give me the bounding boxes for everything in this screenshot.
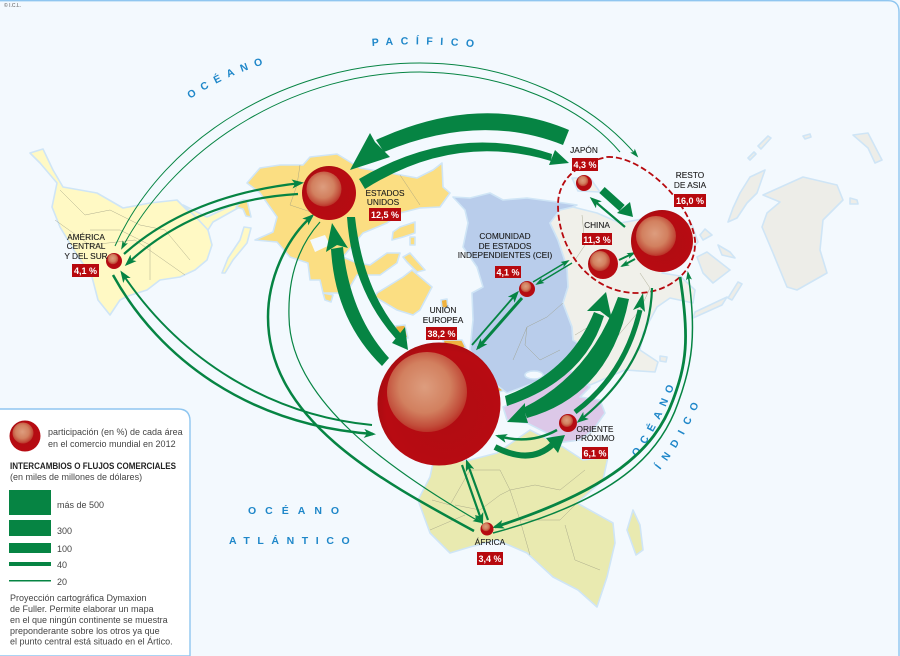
arrow: USA to Japan [359, 142, 569, 189]
panel: legend [0, 409, 190, 656]
projection note: preponderante sobre los otros ya que [10, 626, 160, 636]
label: China [582, 220, 612, 245]
arrow: rest of Asia to Japan [592, 199, 625, 227]
lake: Caspian area [525, 371, 543, 379]
label: Oriente Próximo [575, 424, 615, 459]
land: New Zealand area [728, 170, 858, 222]
label: Japón: 4,3 % [573, 160, 597, 170]
sphere: Rest of Asia [631, 210, 693, 272]
legend sphere key [10, 420, 40, 452]
legend sphere description: en el comercio mundial en 2012 [48, 439, 176, 449]
arrow: USA to EU [347, 217, 408, 350]
key: 20: 20 [57, 577, 67, 587]
projection note: en el que ningún continente se muestra [10, 615, 168, 625]
label: Comunidad de Estados Independientes: INDEPENDIENTES (CEI) [458, 250, 552, 260]
arrow: Asia to America, inner Pacific arc [122, 72, 620, 248]
sphere: Latin America [106, 253, 122, 269]
label: Comunidad de Estados Independientes: DE ESTADOS [479, 241, 532, 251]
land: Africa [418, 430, 615, 607]
sphere: Japan [576, 175, 592, 191]
land: South America [30, 149, 212, 315]
land: European Union fragments [395, 299, 506, 392]
key: 40: 40 [57, 560, 67, 570]
label: China: 11,3 % [583, 235, 611, 245]
arrow: EU to CEI [472, 293, 517, 345]
label: Unión Europea: 38,2 % [427, 329, 456, 339]
land: Central America [183, 200, 243, 230]
sphere: CEI [519, 281, 535, 297]
sphere: Africa [480, 522, 494, 536]
lakes: Arctic America [310, 235, 330, 252]
label: América Central y del Sur: 4,1 % [74, 266, 97, 276]
legend sphere description [48, 427, 183, 449]
region labels [64, 145, 707, 565]
land: Mexico tip [236, 200, 251, 217]
label: África: 3,4 % [478, 554, 502, 564]
label: América Central y del Sur: AMÉRICA [67, 232, 105, 242]
land: Asia [550, 207, 698, 385]
arrow: Africa to USA [268, 216, 474, 531]
key: 100: 100 [57, 544, 72, 554]
label: Estados Unidos: 12,5 % [371, 210, 399, 220]
label: Japón [570, 145, 598, 171]
sphere: United States [302, 166, 356, 220]
label: Oriente Próximo: ORIENTE [577, 424, 614, 434]
label: Oriente Próximo: PRÓXIMO [575, 433, 615, 443]
label: Estados Unidos: ESTADOS [365, 188, 405, 198]
label: Océano (Pacífico): OCÉANO [188, 58, 262, 98]
legend subheading: (en miles de millones de dólares) [10, 472, 142, 482]
sphere: Middle East [559, 414, 577, 432]
key: more than 500: más de 500 [57, 500, 104, 510]
sphere: China [588, 249, 618, 279]
label: Océano Atlántico: OCÉANO [248, 504, 348, 517]
dashed ring around Asian group [558, 157, 695, 293]
label: Unión Europea [423, 305, 464, 340]
label: Índico: ÍNDICO [654, 402, 698, 470]
arrow: EU to China, thick [505, 292, 612, 406]
label: Comunidad de Estados Independientes [458, 231, 552, 278]
legend heading: INTERCAMBIOS O FLUJOS COMERCIALES [10, 461, 176, 471]
label: Japón: JAPÓN [570, 145, 598, 155]
label: Resto de Asia: RESTO [676, 170, 705, 180]
land: Japan [572, 178, 600, 192]
land: Madagascar [627, 510, 643, 555]
label: Oriente Próximo: 6,1 % [583, 448, 607, 458]
credit: © I.C.L. [4, 2, 21, 9]
arrow: CEI to China [533, 261, 568, 282]
projection note: Proyección cartográfica Dymaxion [10, 593, 147, 603]
arrow: Middle East to rest of Asia [575, 293, 645, 412]
arrow: Africa to rest of Asia [493, 273, 693, 533]
arrow: EU to USA, thick [326, 223, 389, 366]
sphere: European Union [378, 342, 500, 466]
arrow: USA to Africa [289, 222, 480, 522]
country borders [55, 165, 650, 570]
label: Pacífico: PACÍFICO [372, 35, 474, 47]
arrow: rest of Asia to Middle East [579, 288, 652, 421]
label: Comunidad de Estados Independientes: 4,1 % [496, 268, 520, 278]
label: Comunidad de Estados Independientes: COMUNIDAD [479, 231, 531, 241]
label: Resto de Asia: 16,0 % [676, 196, 704, 206]
arrow: EU to Africa [462, 465, 482, 522]
projection note [10, 593, 173, 646]
land: Southeast Asian islands [660, 133, 882, 362]
label: Estados Unidos: UNIDOS [367, 197, 400, 207]
label: Resto de Asia: DE ASIA [674, 180, 707, 190]
label: Estados Unidos [365, 188, 405, 221]
label: África: ÁFRICA [475, 537, 506, 547]
arrow: America to Asia, outer Pacific arc [115, 63, 637, 246]
label: Unión Europea: EUROPEA [423, 315, 464, 325]
trade flow arrows [113, 63, 693, 533]
arrow: rest of Asia to Africa [495, 277, 686, 527]
land: Australia [762, 177, 843, 290]
label: Resto de Asia [674, 170, 707, 207]
arrow: China to rest of Asia [619, 253, 634, 260]
label: América Central y del Sur [64, 232, 108, 277]
legend background [0, 409, 190, 656]
land: CEI [453, 193, 578, 393]
arrow: China to EU, thick [507, 297, 629, 423]
land: Middle East [503, 370, 605, 443]
arrow: USA to America [127, 194, 298, 264]
label: Atlántico: ATLÁNTICO [229, 534, 357, 547]
projection note: el punto central está situado en el Ártico. [10, 636, 173, 646]
arrow: Middle East to EU [498, 430, 557, 439]
arrow: Africa to EU [467, 462, 488, 520]
land: North American islands [323, 222, 432, 315]
participation spheres [106, 166, 693, 536]
land: Caribbean islands [222, 227, 251, 273]
arrow: China to CEI [537, 263, 572, 284]
label: Océano (Índico): OCÉANO [632, 385, 673, 456]
label: China: CHINA [584, 220, 610, 230]
arrow: rest of Asia to China [622, 259, 635, 266]
arrow: America to USA [124, 183, 301, 254]
ocean labels [188, 35, 698, 547]
arrow: Japan to rest of Asia [602, 190, 633, 217]
arrow: CEI to EU [478, 298, 522, 348]
label: América Central y del Sur: Y DEL SUR [64, 251, 108, 261]
key: 300: 300 [57, 526, 72, 536]
label: Unión Europea: UNIÓN [430, 305, 456, 315]
arrow: EU to America [122, 273, 372, 425]
label: África [475, 537, 506, 565]
arrow: America to EU [113, 275, 373, 434]
projection note: de Fuller. Permite elaborar un mapa [10, 604, 154, 614]
legend flow widths [9, 490, 104, 587]
legend sphere description: participación (en %) de cada área [48, 427, 183, 437]
world map landmasses [30, 133, 882, 607]
land: North America [247, 154, 450, 293]
arrow: EU to Middle East [495, 435, 565, 456]
arrow: Japan to USA, very thick [350, 113, 569, 170]
label: América Central y del Sur: CENTRAL [67, 241, 106, 251]
